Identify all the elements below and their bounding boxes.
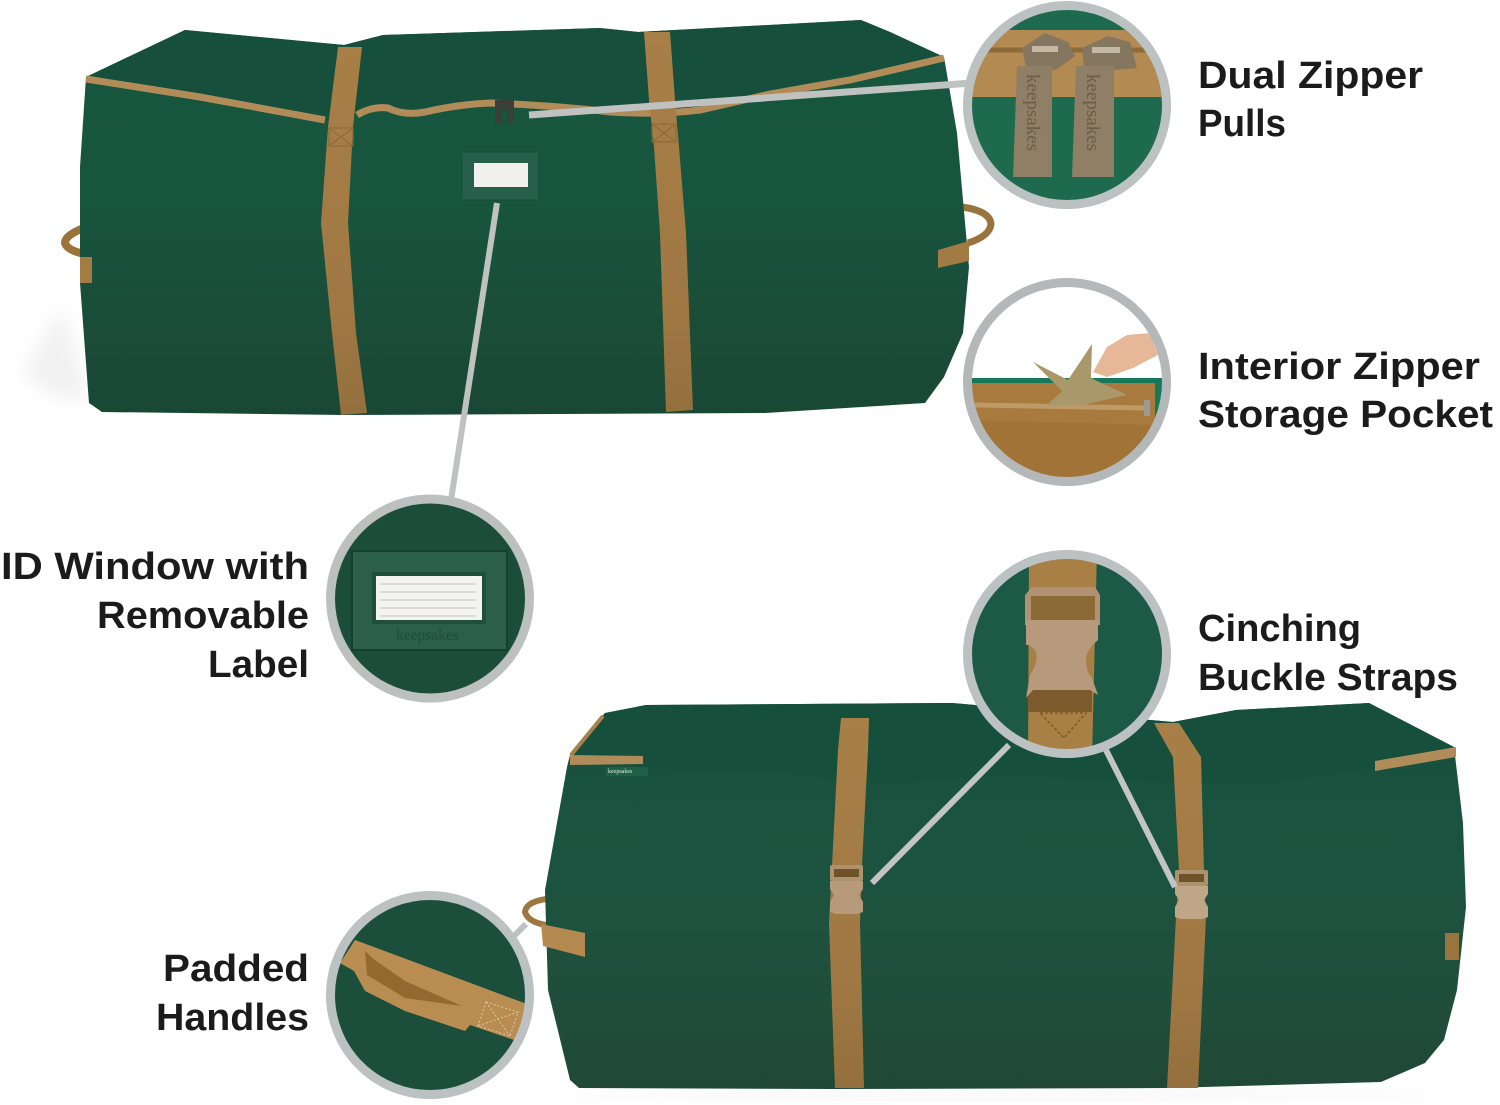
right strap stitching bbox=[652, 124, 676, 142]
label: id window with: ID Window with bbox=[1, 546, 309, 588]
embossed text: keepsakes bbox=[396, 627, 459, 644]
label: storage pocket: Storage Pocket bbox=[1198, 394, 1493, 436]
shadow bbox=[550, 1089, 1450, 1099]
left handle patch bbox=[541, 924, 585, 957]
connector: id window bbox=[451, 203, 497, 500]
label: padded: Padded bbox=[163, 948, 309, 990]
label: dual zipper pulls: Dual Zipper bbox=[1198, 55, 1423, 97]
bag lid shade bbox=[86, 20, 944, 120]
label: pulls: Pulls bbox=[1198, 103, 1286, 145]
connector: handle bbox=[510, 924, 526, 940]
callout: id window bbox=[325, 495, 535, 705]
right strap bbox=[644, 32, 693, 412]
right buckle bbox=[1175, 870, 1208, 919]
zipper trim bbox=[86, 58, 944, 120]
connector: buckle right bbox=[1106, 750, 1175, 887]
bag body bbox=[80, 20, 969, 415]
left handle bbox=[525, 899, 546, 925]
label: label: Label bbox=[208, 644, 309, 686]
pull text: keepsakes bbox=[1082, 74, 1103, 151]
stitching bbox=[478, 1002, 518, 1036]
left buckle bbox=[830, 865, 863, 914]
bag lid shade bbox=[570, 703, 1454, 785]
left handle patch bbox=[80, 257, 92, 283]
left strap bbox=[321, 47, 367, 415]
right strap bbox=[1154, 723, 1206, 1088]
left side trim bbox=[571, 716, 603, 755]
callout: cinching buckle bbox=[965, 550, 1170, 760]
tag bbox=[606, 767, 648, 776]
label: cinching: Cinching bbox=[1198, 608, 1361, 650]
bottom bag bbox=[525, 703, 1466, 1099]
callout: padded handles bbox=[325, 890, 535, 1100]
top bag bbox=[22, 20, 991, 415]
ID window bbox=[462, 152, 539, 200]
label: buckle straps: Buckle Straps bbox=[1198, 657, 1458, 699]
tag text: keepsakes bbox=[608, 769, 633, 775]
star bbox=[1033, 344, 1127, 405]
right edge patch bbox=[1445, 933, 1459, 960]
bag body bbox=[545, 703, 1466, 1089]
zipper pull bbox=[495, 100, 514, 123]
label: removable: Removable bbox=[97, 595, 309, 637]
handle crease bbox=[365, 951, 462, 1006]
connector: buckle left bbox=[872, 745, 1009, 883]
callout: dual zipper pulls bbox=[965, 0, 1170, 210]
shadow bbox=[22, 305, 90, 400]
hand bbox=[1093, 333, 1158, 377]
label: interior zipper: Interior Zipper bbox=[1198, 346, 1480, 388]
left handle bbox=[65, 228, 84, 254]
right handle bbox=[962, 207, 991, 243]
right handle patch bbox=[938, 241, 969, 268]
label: handles: Handles bbox=[156, 997, 309, 1039]
left strap stitching bbox=[329, 128, 353, 146]
pull text: keepsakes bbox=[1022, 74, 1043, 151]
removable label bbox=[376, 576, 482, 620]
right front trim bbox=[1375, 747, 1456, 771]
left front trim bbox=[570, 755, 643, 765]
right zipper pull bbox=[1072, 36, 1137, 177]
callout: interior pocket bbox=[965, 280, 1170, 490]
left strap bbox=[829, 718, 869, 1088]
handle strap and padding bbox=[340, 940, 535, 1044]
connector: zipper bbox=[529, 83, 972, 115]
buckle body bbox=[1026, 620, 1098, 698]
ID label bbox=[474, 163, 528, 187]
left zipper pull bbox=[1013, 33, 1075, 177]
buckle frame bbox=[1025, 587, 1100, 625]
